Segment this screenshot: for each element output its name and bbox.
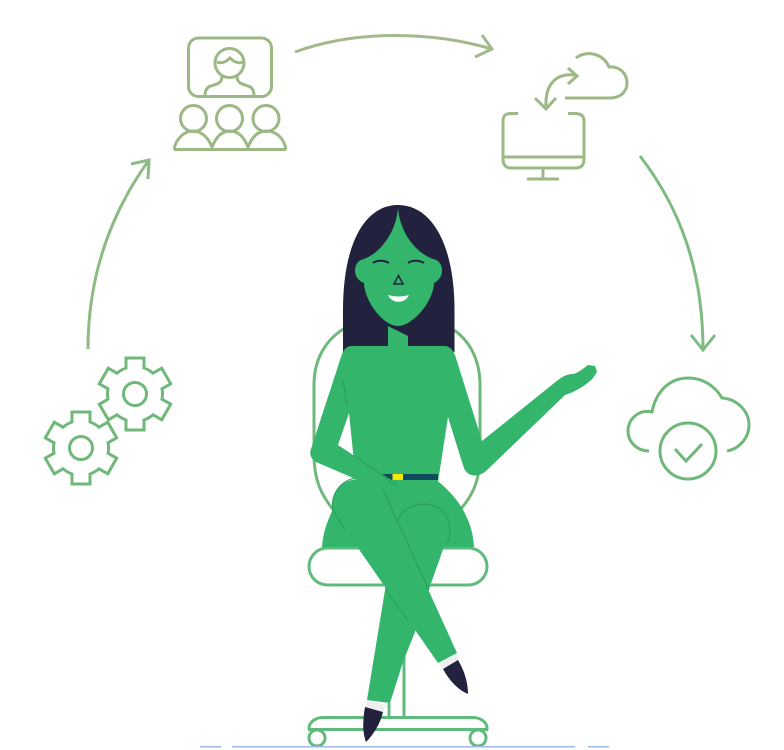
chair back [314, 328, 480, 512]
icon: video presentation and audience [174, 38, 286, 150]
eyes [373, 261, 424, 263]
nose [394, 276, 403, 284]
back leg cuff [365, 700, 387, 712]
belt [382, 474, 438, 480]
neck [388, 326, 408, 350]
back shoe [363, 707, 383, 742]
resting arm [310, 346, 384, 482]
smile [388, 295, 409, 302]
arrow: presentation to cloud sync [295, 35, 492, 57]
front leg cuff [438, 654, 459, 669]
hips [322, 479, 474, 547]
arrow: gears to presentation [88, 160, 149, 349]
front shoe [443, 660, 468, 694]
chair seat [309, 548, 487, 585]
belt buckle [392, 474, 403, 480]
chair wheels [309, 730, 486, 746]
clothing fold lines [332, 380, 450, 621]
ground line [200, 746, 609, 748]
chair base [308, 718, 488, 730]
icon: monitor syncing with cloud [503, 54, 627, 179]
front leg [333, 479, 457, 663]
arrow: cloud sync to cloud done [640, 156, 715, 350]
back leg [367, 538, 447, 703]
chair stem [389, 640, 404, 717]
woman figure [310, 205, 597, 742]
hair [343, 205, 454, 352]
icon: gears [45, 358, 171, 484]
face [355, 208, 442, 326]
icon: cloud with check mark [628, 378, 749, 479]
chair [308, 328, 488, 746]
torso and raised arm [349, 346, 597, 482]
